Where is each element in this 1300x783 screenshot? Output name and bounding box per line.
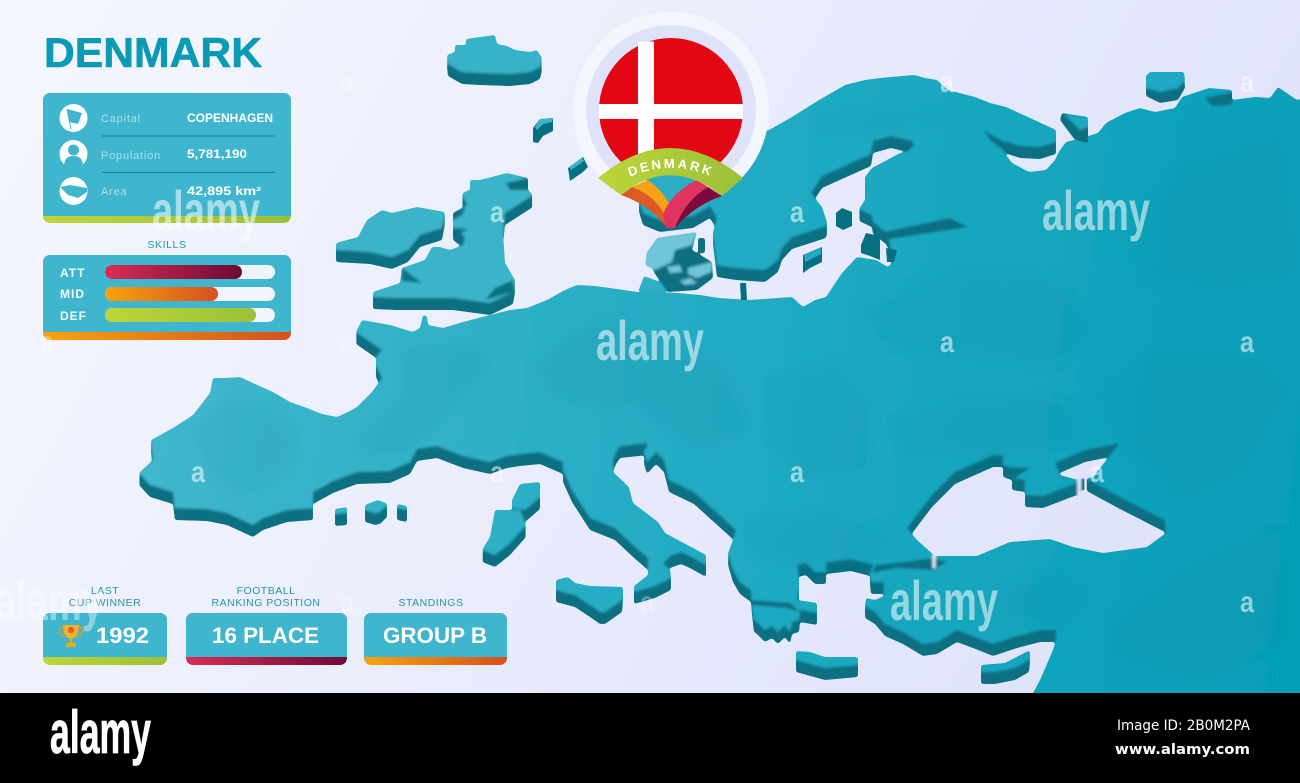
skill bar: def: DEF bbox=[60, 309, 87, 323]
gulf of finland shadow bbox=[884, 218, 968, 240]
corinth gulf shadow bbox=[752, 600, 800, 612]
watermarks: a bbox=[191, 456, 205, 489]
icon: flag bbox=[60, 104, 88, 132]
islands: north atlantic bbox=[533, 118, 588, 181]
watermarks: a bbox=[940, 326, 954, 359]
islands: arctic bbox=[1060, 72, 1185, 143]
watermarks: a bbox=[490, 196, 504, 229]
panel: skills bbox=[43, 255, 291, 340]
flag of denmark bbox=[599, 38, 743, 182]
panel: ranking position bbox=[186, 613, 347, 665]
label: standings: STANDINGS bbox=[399, 597, 463, 609]
area row bbox=[101, 186, 261, 198]
panel: last cup winner: 1992 bbox=[96, 623, 149, 648]
watermarks: alamy bbox=[152, 179, 260, 242]
area row: Area bbox=[101, 186, 128, 198]
watermarks: a bbox=[790, 196, 804, 229]
watermarks: a bbox=[1240, 66, 1254, 99]
crimea shadow bbox=[1003, 467, 1030, 478]
islands: britain and ireland bbox=[336, 173, 533, 315]
map pin: denmark bbox=[573, 12, 769, 228]
watermarks: a bbox=[1240, 586, 1254, 619]
skill bar: mid: MID bbox=[60, 287, 85, 301]
capital row: COPENHAGEN bbox=[187, 113, 273, 125]
islands: iceland bbox=[447, 35, 542, 86]
skill bar: def bbox=[60, 308, 275, 323]
population row: Population bbox=[101, 150, 161, 162]
skill bar: mid bbox=[60, 287, 275, 301]
label: football ranking position: FOOTBALL bbox=[237, 585, 295, 597]
capital row bbox=[101, 113, 273, 125]
watermarks: a bbox=[490, 456, 504, 489]
capital row: Capital bbox=[101, 113, 141, 125]
islands: mediterranean bbox=[335, 482, 1030, 684]
panel: last cup winner bbox=[43, 613, 167, 665]
icon: trophy bbox=[59, 625, 83, 647]
footer bar: www.alamy.com bbox=[1115, 742, 1250, 758]
pin ribbons bbox=[621, 172, 722, 228]
population row bbox=[101, 149, 247, 162]
panel: standings: GROUP B bbox=[383, 623, 487, 648]
label: last cup winner: LAST bbox=[91, 585, 119, 597]
watermarks: a bbox=[790, 456, 804, 489]
label: football ranking position: RANKING POSITION bbox=[212, 597, 320, 609]
watermarks: a bbox=[640, 586, 654, 619]
thrace shadow bbox=[872, 558, 947, 573]
denmark highlighted bbox=[638, 232, 713, 293]
map: mainland Europe bbox=[139, 75, 1300, 722]
title: DENMARK bbox=[44, 29, 262, 76]
area row: 42,895 km² bbox=[187, 186, 261, 198]
pin banner bbox=[598, 148, 743, 196]
watermarks: a bbox=[340, 66, 354, 99]
arctic coast island bbox=[1205, 92, 1232, 106]
bosporus strait bbox=[932, 555, 936, 568]
panel: country facts bbox=[43, 93, 291, 223]
footer bar bbox=[0, 693, 1300, 783]
watermarks: a bbox=[340, 586, 354, 619]
footer bar: Image ID: 2B0M2PA bbox=[1117, 718, 1250, 734]
icon: country shape bbox=[60, 177, 88, 205]
watermarks: a bbox=[1240, 326, 1254, 359]
watermarks: a bbox=[340, 326, 354, 359]
footer bar: alamy bbox=[50, 699, 151, 766]
kola shadow bbox=[983, 130, 1006, 150]
islands: baltic bbox=[740, 208, 897, 300]
icon: person bbox=[60, 140, 88, 168]
watermarks: a bbox=[40, 326, 54, 359]
panel: standings bbox=[364, 613, 507, 665]
panel: ranking position: 16 PLACE bbox=[212, 623, 319, 648]
watermarks: alamy bbox=[596, 309, 704, 372]
watermarks: a bbox=[1090, 456, 1104, 489]
watermarks: a bbox=[940, 66, 954, 99]
watermarks bbox=[0, 66, 1254, 632]
skill bar: att bbox=[60, 265, 275, 280]
pin banner label: DENMARK bbox=[628, 159, 712, 176]
kerch strait bbox=[1078, 478, 1080, 497]
watermarks: alamy bbox=[1042, 179, 1150, 242]
label: last cup winner: CUP WINNER bbox=[69, 597, 141, 609]
skill bar: att: ATT bbox=[60, 266, 85, 280]
skills heading: SKILLS bbox=[147, 239, 187, 251]
population row: 5,781,190 bbox=[187, 149, 247, 161]
watermarks: alamy bbox=[890, 569, 998, 632]
